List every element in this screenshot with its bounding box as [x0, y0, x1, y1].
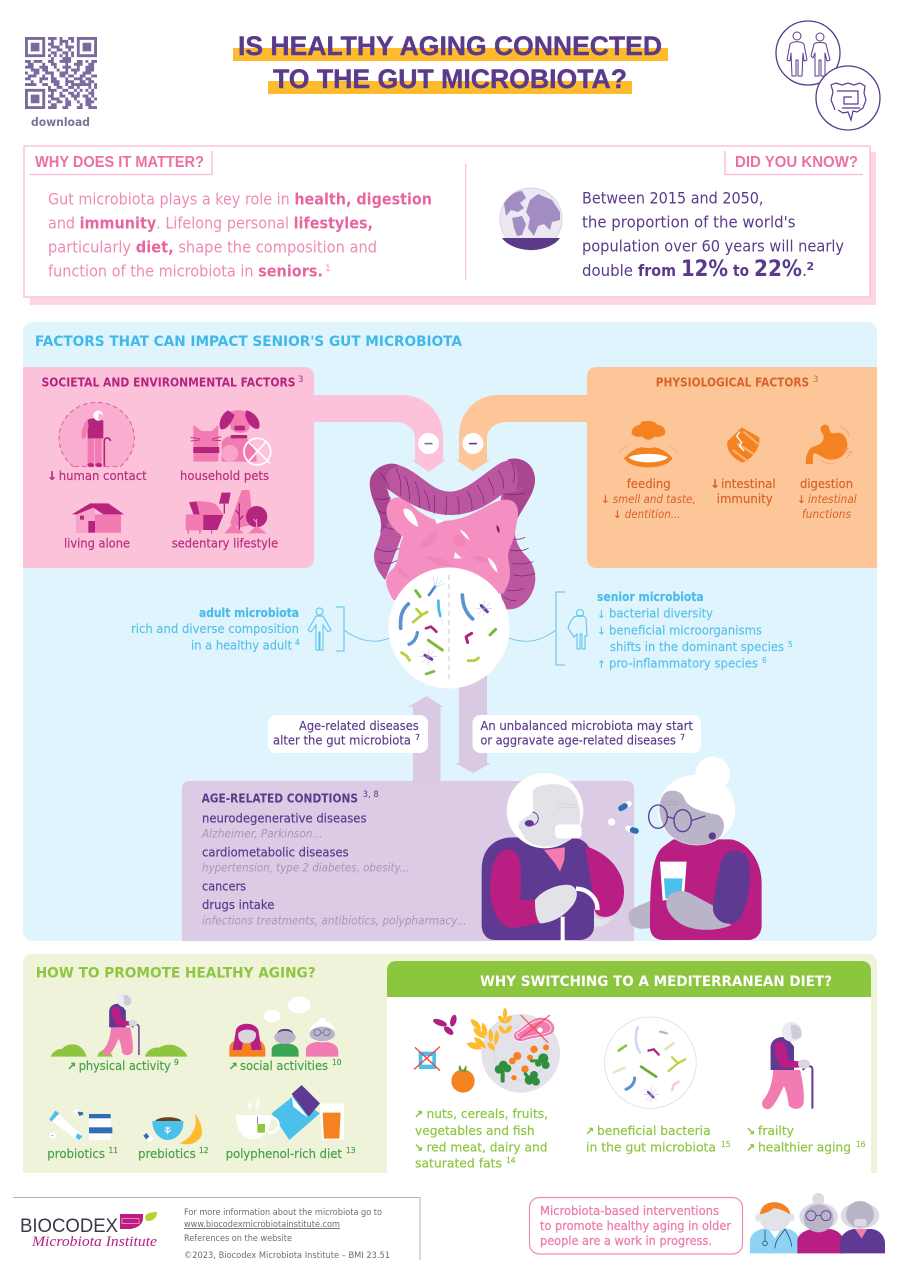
icon: social activities	[229, 997, 338, 1057]
labels: physiological factors: functions	[802, 508, 851, 521]
icon: globe	[500, 188, 562, 250]
text: adult microbiota: rich and diverse composition	[131, 621, 299, 636]
text: gut microbiota role: function of the microbiota in seniors.	[48, 262, 323, 280]
callout: microbiota-based interventions: Microbiota-based interventions	[540, 1204, 719, 1218]
heading: how to promote: HOW TO PROMOTE HEALTHY AGING?	[36, 966, 316, 982]
text: senior microbiota	[597, 589, 793, 671]
labels: diet benefits: ↗	[746, 1142, 755, 1155]
icon: probiotics	[49, 1109, 112, 1140]
text: gut microbiota role	[48, 190, 432, 280]
callout: microbiota-based interventions: people are a work in progress.	[540, 1234, 712, 1248]
labels: societal factors: human contact	[59, 468, 147, 483]
labels: diet benefits	[414, 1106, 866, 1171]
labels: diet benefits: beneficial bacteria	[597, 1123, 711, 1138]
list: conditions: infections treatments, antibiotics, polypharmacy...	[202, 914, 467, 928]
panel: societal and environmental factors	[23, 367, 314, 568]
icon: sedentary lifestyle	[186, 490, 267, 534]
labels: diet benefits: nuts, cereals, fruits,	[426, 1106, 548, 1121]
heading: societal: SOCIETAL AND ENVIRONMENTAL FACTORS	[42, 376, 296, 390]
labels: diet benefits: 16	[856, 1140, 866, 1149]
illustration: pills	[608, 804, 636, 831]
text: senior microbiota: pro-inflammatory species	[609, 656, 758, 671]
icon: senior figure with bracket	[556, 592, 587, 665]
icon: Mediterranean food plate	[414, 1007, 560, 1093]
footer: information text: References on the website	[184, 1233, 292, 1244]
label: unbalanced microbiota: or aggravate age-related diseases	[480, 734, 676, 748]
icon: seniors and intestine circles	[776, 21, 880, 130]
text: senior microbiota: ↓	[597, 609, 606, 621]
text: gut microbiota role: particularly diet, shape the composition and	[48, 238, 377, 256]
footer: information text: ©2023, Biocodex Microbiota Institute – BMI 23.51	[184, 1250, 390, 1261]
text: adult microbiota: 4	[295, 638, 300, 647]
list: conditions: drugs intake	[202, 897, 275, 912]
labels: promotion items: ↗	[228, 1060, 238, 1073]
text: population statistic: 12%	[681, 256, 728, 282]
heading: why does it matter: WHY DOES IT MATTER?	[35, 154, 204, 171]
download label: download	[31, 115, 90, 129]
label: unbalanced microbiota	[472, 715, 701, 753]
heading: did you know: DID YOU KNOW?	[735, 154, 858, 171]
labels: physiological factors: dentition...	[625, 508, 681, 521]
illustration: doctor and seniors	[750, 1193, 885, 1253]
icon: living alone house	[72, 503, 124, 533]
panel: why does it matter / did you know	[24, 146, 876, 305]
labels: diet benefits: ↘	[414, 1142, 423, 1155]
labels: diet benefits: ↘	[746, 1125, 755, 1138]
arrow: microbiota aggravates diseases	[455, 670, 491, 773]
labels: diet benefits: ↗	[585, 1125, 594, 1138]
heading: physiological: 3	[813, 375, 818, 385]
text: senior microbiota: ↑	[597, 659, 606, 671]
icon: shield	[727, 427, 759, 463]
panel: why switching to a Mediterranean diet	[387, 961, 871, 1173]
label: diseases alter microbiota: 7	[415, 733, 420, 742]
labels: diet benefits: 14	[506, 1156, 516, 1165]
heading: age-related conditions: 3, 8	[363, 790, 379, 800]
icon: household pets crossed out	[191, 410, 271, 465]
labels: societal factors: sedentary lifestyle	[172, 536, 278, 550]
footer: information text: www.biocodexmicrobiotainstitute.com	[184, 1219, 340, 1230]
illustration: senior man with cane	[482, 773, 624, 942]
labels: physiological factors: digestion	[800, 476, 853, 491]
footer: logo: BIOCODEX	[20, 1216, 118, 1237]
labels: physiological factors	[601, 476, 857, 521]
text: adult microbiota: adult microbiota	[199, 605, 299, 620]
labels: diet benefits: red meat, dairy and	[426, 1140, 548, 1155]
labels: promotion items: 11	[108, 1146, 118, 1155]
list: conditions	[201, 811, 467, 928]
illustration: colon and small intestine	[370, 459, 535, 609]
QR code	[25, 38, 100, 108]
footer: information text: For more information about the microbiota go to	[184, 1207, 382, 1218]
heading: physiological: PHYSIOLOGICAL FACTORS	[656, 376, 809, 390]
text: population statistic: Between 2015 and 2050,	[582, 188, 764, 208]
heading: why does it matter	[29, 151, 212, 174]
labels: diet benefits: 15	[721, 1140, 731, 1149]
list: conditions: hypertension, type 2 diabetes, obesity...	[202, 862, 410, 875]
labels: promotion items: 13	[346, 1146, 356, 1155]
icon: polyphenol-rich diet	[236, 1085, 344, 1140]
heading: age-related conditions: AGE-RELATED CONDTIONS	[202, 792, 358, 806]
heading: factors: FACTORS THAT CAN IMPACT SENIOR'S GUT MICROBIOTA	[35, 334, 463, 350]
panel: physiological factors	[587, 367, 877, 568]
panel: factors that can impact senior's gut microbiota	[23, 322, 877, 942]
text: population statistic: to	[733, 261, 749, 280]
transverse colon	[370, 459, 535, 515]
text: population statistic: 22%	[754, 256, 802, 282]
footer: information text	[13, 1198, 420, 1261]
labels: promotion items: prebiotics	[138, 1146, 196, 1161]
list: conditions: neurodegenerative diseases	[202, 811, 366, 826]
icon: stomach	[806, 425, 852, 464]
text: senior microbiota: shifts in the dominant species	[610, 639, 784, 654]
heading: Mediterranean diet: WHY SWITCHING TO A MEDITERRANEAN DIET?	[480, 974, 832, 990]
title	[233, 31, 668, 94]
text: adult microbiota: in a healthy adult	[191, 638, 292, 652]
text: population statistic: population over 60 years will nearly	[582, 236, 844, 256]
labels: diet benefits: in the gut microbiota	[586, 1140, 716, 1155]
title: IS HEALTHY AGING CONNECTED	[238, 31, 662, 61]
callout: microbiota-based interventions	[530, 1198, 742, 1254]
labels: physiological factors: intestinal	[808, 493, 857, 506]
labels: diet benefits: ↗	[414, 1108, 423, 1121]
callout: microbiota-based interventions: to promote healthy aging in older	[540, 1219, 731, 1233]
text: population statistic: the proportion of the world's	[582, 212, 796, 232]
labels: promotion items: 12	[199, 1146, 209, 1155]
labels: promotion items	[47, 1058, 356, 1161]
icon: nose and mouth	[618, 421, 678, 467]
labels: societal factors	[47, 468, 278, 550]
labels: diet benefits: vegetables and fish	[415, 1123, 535, 1138]
icon: physical activity	[51, 993, 187, 1057]
labels: promotion items: 9	[174, 1058, 179, 1067]
labels: diet benefits: healthier aging	[758, 1140, 851, 1155]
heading: societal: 3	[298, 375, 303, 385]
footer: logo	[20, 1212, 157, 1250]
text: population statistic: double	[582, 261, 633, 280]
label: unbalanced microbiota: An unbalanced microbiota may start	[480, 719, 693, 733]
footer: logo: Microbiota Institute	[31, 1234, 157, 1250]
labels: promotion items: physical activity	[79, 1058, 171, 1073]
illustration: senior woman with glass	[628, 757, 762, 940]
icon: beneficial bacteria circle	[605, 1017, 696, 1108]
list: conditions: Alzheimer, Parkinson...	[201, 828, 323, 840]
text: senior microbiota: 6	[762, 656, 767, 665]
text: gut microbiota role: Gut microbiota plays a key role in health, digestion	[48, 190, 432, 208]
icon: human contact	[59, 402, 134, 467]
list: conditions: cardiometabolic diseases	[202, 845, 349, 860]
panel: age-related conditions	[182, 670, 634, 941]
illustration: microbiota comparison circle	[344, 568, 556, 688]
labels: promotion items: social activities	[240, 1058, 328, 1073]
text: senior microbiota: ↓	[597, 625, 606, 637]
text: population statistic: .	[802, 261, 807, 280]
arrow: diseases alter microbiota	[408, 696, 443, 782]
labels: promotion items: probiotics	[47, 1146, 105, 1161]
text: senior microbiota: bacterial diversity	[609, 606, 714, 621]
panel: how to promote healthy aging	[23, 954, 877, 1173]
list: conditions: cancers	[202, 879, 246, 894]
text: gut microbiota role: and immunity. Lifelong personal lifestyles,	[48, 214, 373, 232]
labels: societal factors: living alone	[64, 536, 130, 550]
label: diseases alter microbiota: alter the gut microbiota	[273, 734, 411, 748]
heading: did you know	[725, 151, 863, 174]
labels: societal factors: ↓	[47, 469, 57, 483]
text: population statistic	[582, 188, 844, 282]
labels: societal factors: household pets	[180, 468, 269, 483]
text: gut microbiota role: 1	[325, 264, 331, 274]
arrow: societal factors to gut	[310, 395, 446, 472]
labels: promotion items: 10	[332, 1058, 342, 1067]
labels: physiological factors: ↓	[613, 509, 622, 521]
text: senior microbiota: 5	[788, 640, 793, 649]
label: diseases alter microbiota	[268, 715, 428, 753]
labels: promotion items: polyphenol-rich diet	[226, 1146, 342, 1161]
labels: physiological factors: smell and taste,	[613, 493, 696, 506]
labels: physiological factors: ↓	[710, 477, 720, 491]
labels: physiological factors: ↓	[601, 494, 610, 506]
labels: physiological factors: intestinal	[721, 476, 776, 491]
icon: walking senior	[762, 1022, 812, 1109]
arrow: physiological factors to gut	[456, 395, 590, 471]
labels: physiological factors: feeding	[627, 476, 671, 491]
title: TO THE GUT MICROBIOTA?	[273, 64, 627, 94]
label: unbalanced microbiota: 7	[680, 733, 685, 742]
labels: physiological factors: immunity	[717, 491, 773, 506]
icon: prebiotics	[143, 1113, 202, 1144]
labels: promotion items: ↗	[67, 1060, 76, 1073]
labels: physiological factors: ↓	[797, 494, 806, 506]
labels: diet benefits: saturated fats	[415, 1156, 502, 1171]
text: adult microbiota	[131, 605, 300, 652]
labels: diet benefits: frailty	[758, 1123, 795, 1138]
label: diseases alter microbiota: Age-related diseases	[299, 719, 419, 733]
icon: adult figure with bracket	[308, 607, 344, 651]
text: senior microbiota: senior microbiota	[597, 589, 704, 604]
text: population statistic: 2	[806, 260, 814, 273]
text: senior microbiota: beneficial microorganisms	[609, 622, 762, 637]
text: population statistic: from	[638, 261, 676, 280]
